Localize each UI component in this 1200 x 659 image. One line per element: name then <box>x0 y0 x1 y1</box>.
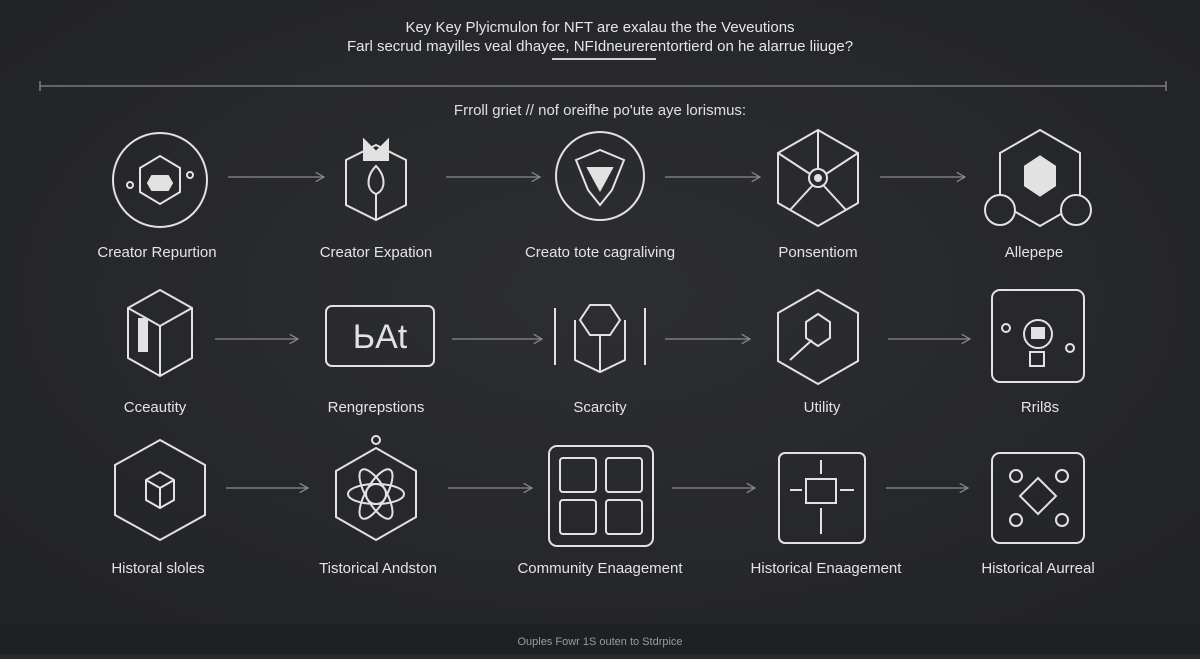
title <box>347 19 853 60</box>
subtitle: Frroll griet // nof oreifhe po'ute aye lorismus: <box>454 102 746 119</box>
labels: Creator Expation <box>320 244 432 261</box>
icon: ponsentiom <box>778 130 858 226</box>
icon: renegressions <box>326 306 434 366</box>
icon: tistorical andston <box>336 436 416 540</box>
icon: scarcity <box>555 305 645 372</box>
labels: Tistorical Andston <box>319 560 437 577</box>
icon: creator tote <box>556 132 644 220</box>
footer band <box>0 624 1200 654</box>
icon: community engagement <box>549 446 653 546</box>
icon: allepepe <box>985 130 1091 226</box>
labels: Allepepe <box>1005 244 1063 261</box>
title: Key Key Plyicmulon for NFT are exalau the the Veveutions <box>405 19 795 36</box>
icon: utility <box>778 290 858 384</box>
icon: historal sloles <box>115 440 205 540</box>
title: Farl secrud mayilles veal dhayee, NFIdneurerentortierd on he alarrue liiuge? <box>347 38 853 55</box>
labels: Cceautity <box>124 399 187 416</box>
labels: Community Enaagement <box>517 560 683 577</box>
labels: Rengrepstions <box>328 399 424 416</box>
labels: Creator Repurtion <box>97 244 217 261</box>
labels: Rril8s <box>1021 399 1059 416</box>
labels: Creato tote cagraliving <box>525 244 675 261</box>
divider <box>40 81 1166 91</box>
icon: creator expation <box>346 140 406 220</box>
icon: historical aurreal <box>992 453 1084 543</box>
labels: Ponsentiom <box>778 244 858 261</box>
icon: renegressions: ЬAt <box>353 318 408 356</box>
labels: Historical Enaagement <box>751 560 902 577</box>
arrows <box>215 177 970 488</box>
icon: community <box>128 290 192 376</box>
icon: historical enaagement <box>779 453 865 543</box>
labels: Historical Aurreal <box>981 560 1095 577</box>
labels: Historal sloles <box>111 560 205 577</box>
icon: rrils <box>992 290 1084 382</box>
labels: Scarcity <box>573 399 627 416</box>
footer band: Ouples Fowr 1S outen to Stdrpice <box>517 636 683 648</box>
labels <box>97 244 1095 577</box>
icon: creator reputation <box>113 133 207 227</box>
labels: Utility <box>804 399 841 416</box>
